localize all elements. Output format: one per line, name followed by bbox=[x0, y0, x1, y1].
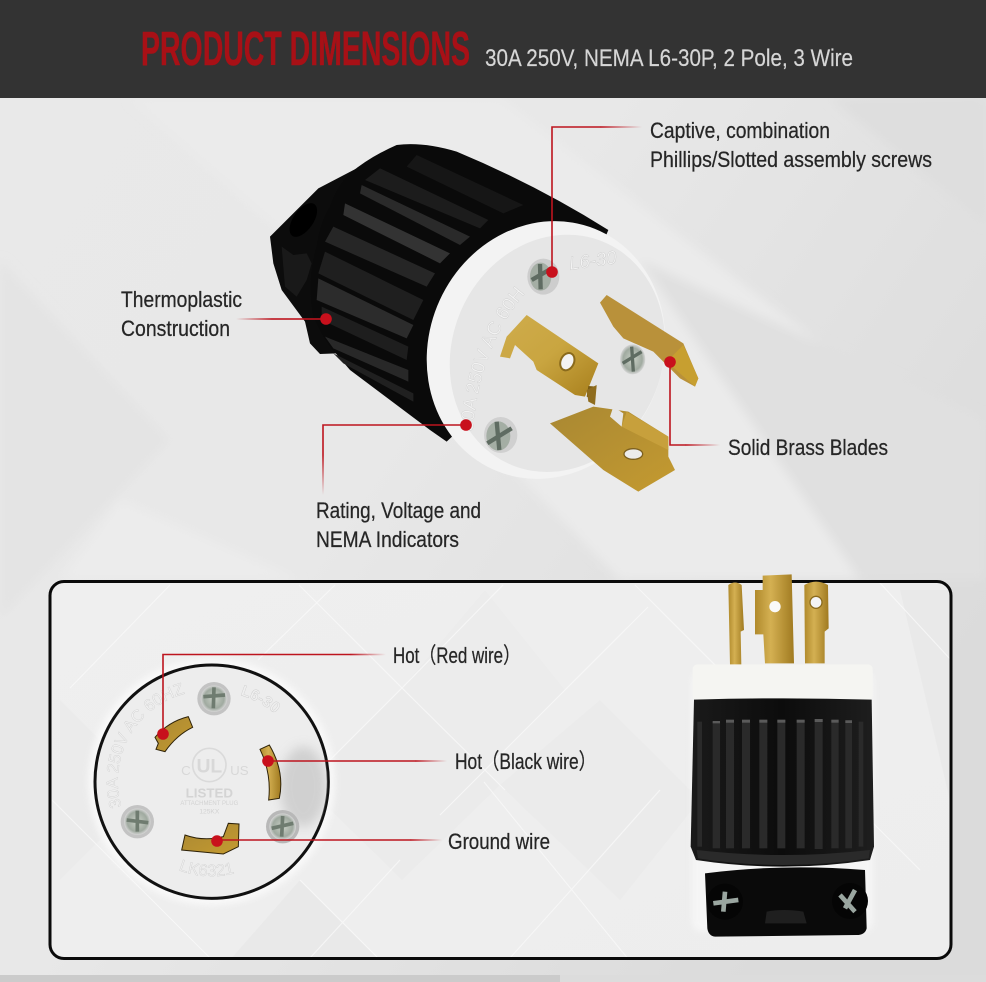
blade A bbox=[500, 315, 598, 397]
terminal block bbox=[705, 867, 867, 937]
white collar bbox=[693, 664, 873, 700]
ribs bbox=[697, 719, 863, 849]
callout: hot red bbox=[157, 643, 520, 740]
callout: screws: Captive, combination bbox=[650, 118, 830, 143]
main plug photo: L6-30 bbox=[568, 246, 618, 274]
UL mark: 125KX bbox=[199, 808, 220, 815]
header bar bbox=[0, 0, 986, 98]
title: PRODUCT DIMENSIONS bbox=[141, 23, 470, 76]
black body bbox=[691, 698, 874, 867]
callout: ground: Ground wire bbox=[448, 829, 550, 854]
callout: hot black: Hot（Black wire） bbox=[455, 749, 596, 774]
callout: ground bbox=[211, 829, 550, 854]
ribs bbox=[343, 203, 450, 263]
callout: hot black bbox=[262, 749, 596, 774]
callout: rating bbox=[316, 419, 481, 552]
main plug photo bbox=[270, 144, 698, 492]
screws bbox=[527, 259, 559, 295]
subtitle: 30A 250V, NEMA L6-30P, 2 Pole, 3 Wire bbox=[485, 45, 853, 72]
slot black hot bbox=[260, 745, 281, 800]
face view of plug bbox=[89, 660, 334, 903]
face view of plug: LK6321 bbox=[180, 860, 234, 876]
callout: hot red: Hot（Red wire） bbox=[393, 643, 520, 668]
callout: screws: Phillips/Slotted assembly screws bbox=[650, 147, 932, 172]
halo bbox=[692, 672, 873, 932]
blades bbox=[728, 582, 744, 665]
UL mark: C bbox=[181, 763, 191, 778]
UL mark: LISTED bbox=[186, 785, 233, 800]
callout: rating: NEMA Indicators bbox=[316, 527, 459, 552]
panel: wiring bbox=[50, 582, 951, 960]
callout: brass blades: Solid Brass Blades bbox=[728, 435, 888, 460]
callout: thermoplastic: Thermoplastic bbox=[121, 287, 242, 312]
white ring bbox=[388, 185, 704, 515]
face print: 30A 250V AC 60HZ bbox=[106, 682, 185, 808]
callout: rating: Rating, Voltage and bbox=[316, 498, 481, 523]
blade B bbox=[600, 295, 698, 387]
callout: screws bbox=[546, 118, 932, 278]
UL mark: US bbox=[230, 763, 249, 778]
slot red hot bbox=[155, 717, 193, 752]
face print: 30A 250V AC 60HZ bbox=[460, 286, 524, 431]
UL mark: UL bbox=[196, 756, 222, 777]
side view of plug bbox=[691, 574, 874, 937]
blade C bbox=[550, 407, 675, 492]
screws bbox=[197, 682, 231, 715]
slot ground bbox=[182, 823, 239, 854]
callout: brass blades bbox=[664, 356, 888, 460]
UL mark: ATTACHMENT PLUG bbox=[180, 801, 239, 807]
callout: thermoplastic bbox=[121, 287, 332, 341]
callout: thermoplastic: Construction bbox=[121, 316, 230, 341]
face view of plug: L6-30 bbox=[241, 685, 280, 712]
UL mark bbox=[180, 748, 249, 815]
face bbox=[414, 202, 700, 505]
rear terminal block bbox=[270, 167, 383, 354]
body bbox=[311, 144, 608, 442]
